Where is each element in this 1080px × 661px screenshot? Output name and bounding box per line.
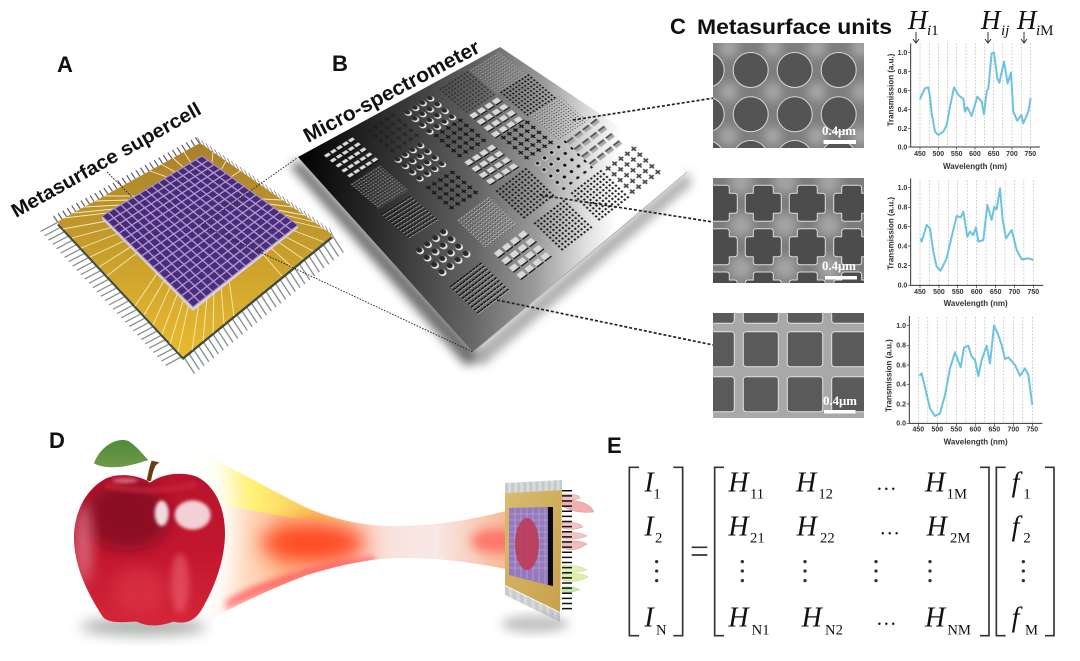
chart 1: transmission spectrum: 1.0 xyxy=(898,50,907,57)
chart 2: transmission spectrum: 0.8 xyxy=(898,205,907,212)
chart 3: transmission spectrum xyxy=(884,316,1042,446)
matrix equation xyxy=(629,467,1054,638)
label: Metasurface supercell: Metasurface supercell xyxy=(8,98,205,222)
chart 3: transmission spectrum: 500 xyxy=(932,427,943,434)
vector I: 2 xyxy=(655,530,662,546)
chart 1: transmission spectrum: 700 xyxy=(1006,151,1018,158)
vector I: N xyxy=(656,622,667,638)
bonding wires xyxy=(63,152,325,352)
vector I xyxy=(643,468,667,638)
vector f: f xyxy=(1012,468,1023,499)
panel A: metasurface chip xyxy=(48,140,338,366)
apple leaf xyxy=(94,440,148,467)
chart 3: transmission spectrum: 550 xyxy=(951,427,962,434)
chart 3: transmission spectrum: 0.8 xyxy=(896,343,906,350)
chip shadow xyxy=(501,615,569,633)
panel label B: B xyxy=(332,51,348,76)
chart 1: transmission spectrum: 450 xyxy=(914,151,926,158)
matrix H: H xyxy=(926,512,949,543)
matrix H: 2M xyxy=(950,530,970,546)
matrix H: 12 xyxy=(818,486,833,502)
plate surface xyxy=(298,47,687,352)
gold substrate xyxy=(57,146,333,360)
column markers H i1, H ij, H iM: H xyxy=(907,5,929,35)
apple stem xyxy=(147,461,159,481)
metasurface patches xyxy=(322,51,664,315)
SEM image: circular holes: 0.4μm xyxy=(822,123,856,138)
vector f xyxy=(1012,468,1038,638)
chip pins xyxy=(505,485,562,488)
chart 1: transmission spectrum: 500 xyxy=(933,151,944,158)
matrix H: 1M xyxy=(947,486,967,502)
chart 1: transmission spectrum: 0.2 xyxy=(898,126,907,133)
chart 2: transmission spectrum: 750 xyxy=(1028,289,1039,296)
chart 3: transmission spectrum: 1.0 xyxy=(896,323,906,330)
vector I: I xyxy=(643,468,655,499)
chart 2: transmission spectrum xyxy=(886,178,1043,308)
panel B: micro-spectrometer plate xyxy=(290,47,692,366)
vector I: 1 xyxy=(653,486,661,502)
column markers H i1, H ij, H iM: iM xyxy=(1036,23,1054,39)
chart 2: transmission spectrum: 0.0 xyxy=(898,282,907,289)
SEM image: square holes xyxy=(713,313,864,418)
chart 2: transmission spectrum: 0.2 xyxy=(898,263,907,270)
panel label E: E xyxy=(607,433,622,458)
apple image on die xyxy=(515,518,539,570)
matrix H: … xyxy=(876,608,897,630)
panel label A: A xyxy=(57,52,73,77)
miniature chip with spectra xyxy=(501,485,594,633)
chart 1: transmission spectrum: 600 xyxy=(969,151,981,158)
column markers H i1, H ij, H iM: H xyxy=(980,5,1002,35)
chart 1: transmission spectrum: 0.8 xyxy=(898,69,907,76)
chart 1: transmission spectrum: Wavelength (nm) xyxy=(943,162,1007,171)
chart 3: transmission spectrum: 0.2 xyxy=(896,401,906,408)
matrix H: … xyxy=(879,517,900,539)
matrix H: … xyxy=(876,473,897,495)
chart 1: transmission spectrum: 650 xyxy=(988,151,1000,158)
chart 3: transmission spectrum: 450 xyxy=(913,427,924,434)
light beam from apple to chip xyxy=(202,454,505,620)
matrix H: H xyxy=(795,468,818,499)
chart 2: transmission spectrum: 650 xyxy=(990,289,1002,296)
heading: C Metasurface units: C xyxy=(670,14,686,39)
chart 3: transmission spectrum: 0.0 xyxy=(896,421,906,428)
chart 3: transmission spectrum: 700 xyxy=(1008,427,1019,434)
vector f: M xyxy=(1025,622,1038,638)
column markers H i1, H ij, H iM xyxy=(907,5,1054,43)
SEM image: circular holes xyxy=(713,43,864,148)
chart 2: transmission spectrum: 700 xyxy=(1009,289,1020,296)
apple body xyxy=(74,474,225,626)
matrix H: H xyxy=(924,603,947,634)
chart 3: transmission spectrum: Wavelength (nm) xyxy=(944,437,1008,446)
chart 2: transmission spectrum: 0.4 xyxy=(898,243,907,250)
chip body xyxy=(505,490,562,612)
chart 2: transmission spectrum: Transmission (a.u.) xyxy=(886,197,895,270)
SEM image: cross holes: 0.4μm xyxy=(822,258,856,273)
SEM image: cross holes xyxy=(713,178,864,283)
dotted connector lines xyxy=(107,98,714,352)
matrix H: 11 xyxy=(750,486,764,502)
chart 3: transmission spectrum: Transmission (a.u.) xyxy=(884,339,893,412)
chart 3: transmission spectrum: 0.4 xyxy=(896,382,906,389)
chart 1: transmission spectrum: 0.6 xyxy=(898,88,907,95)
SEM image: square holes: 0.4μm xyxy=(823,393,857,408)
equals sign xyxy=(692,547,707,555)
chip pins xyxy=(48,140,338,366)
chart 2: transmission spectrum: 0.6 xyxy=(898,224,907,231)
column markers H i1, H ij, H iM: H xyxy=(1016,5,1038,35)
matrix H: 21 xyxy=(750,530,765,546)
metasurface die xyxy=(102,216,298,311)
chart 2: transmission spectrum: 450 xyxy=(914,289,926,296)
column markers H i1, H ij, H iM: ij xyxy=(1001,23,1009,39)
vector I: I xyxy=(643,512,655,543)
chart 1: transmission spectrum: 0.0 xyxy=(898,144,907,151)
apple xyxy=(70,440,230,636)
vertical ellipses xyxy=(655,560,1025,582)
label: Micro-spectrometer: Micro-spectrometer xyxy=(300,36,484,147)
chart 1: transmission spectrum: 750 xyxy=(1025,151,1036,158)
brackets xyxy=(629,467,1054,636)
vector f: f xyxy=(1012,512,1023,543)
chart 2: transmission spectrum: 600 xyxy=(971,289,983,296)
chart 3: transmission spectrum: 600 xyxy=(970,427,981,434)
vector f: 1 xyxy=(1023,486,1031,502)
matrix H: H xyxy=(727,512,750,543)
panel label D: D xyxy=(49,428,65,453)
chart 3: transmission spectrum: 750 xyxy=(1027,427,1038,434)
chart 2: transmission spectrum: Wavelength (nm) xyxy=(944,299,1008,308)
chart 1: transmission spectrum: 550 xyxy=(951,151,963,158)
matrix H: N2 xyxy=(825,622,843,638)
plate shadow xyxy=(290,160,484,366)
chart 1: transmission spectrum: 0.4 xyxy=(898,107,907,114)
chip die xyxy=(509,507,548,585)
matrix H: H xyxy=(801,603,824,634)
column markers H i1, H ij, H iM: i1 xyxy=(927,23,939,39)
chart 2: transmission spectrum: 500 xyxy=(933,289,945,296)
matrix H: H xyxy=(796,512,819,543)
chart 2: transmission spectrum: 550 xyxy=(952,289,964,296)
chart 3: transmission spectrum: 0.6 xyxy=(896,362,906,369)
matrix H: N1 xyxy=(752,622,770,638)
matrix H: 22 xyxy=(820,530,835,546)
chart 2: transmission spectrum: 1.0 xyxy=(898,185,907,192)
chart 3: transmission spectrum: 650 xyxy=(989,427,1000,434)
vector I: I xyxy=(643,603,655,634)
heading: C Metasurface units: Metasurface units xyxy=(697,15,892,39)
chart 1: transmission spectrum xyxy=(887,43,1040,171)
apple shadow xyxy=(80,617,207,636)
spectral lobes xyxy=(562,494,594,592)
matrix H xyxy=(727,468,971,638)
chart 1: transmission spectrum: Transmission (a.u.) xyxy=(887,53,896,126)
vector f: f xyxy=(1012,603,1023,634)
matrix H: NM xyxy=(947,622,971,638)
matrix H: H xyxy=(727,603,750,634)
vector f: 2 xyxy=(1023,530,1031,546)
black edge bar xyxy=(548,507,553,586)
matrix H: H xyxy=(727,468,750,499)
matrix H: H xyxy=(924,468,947,499)
